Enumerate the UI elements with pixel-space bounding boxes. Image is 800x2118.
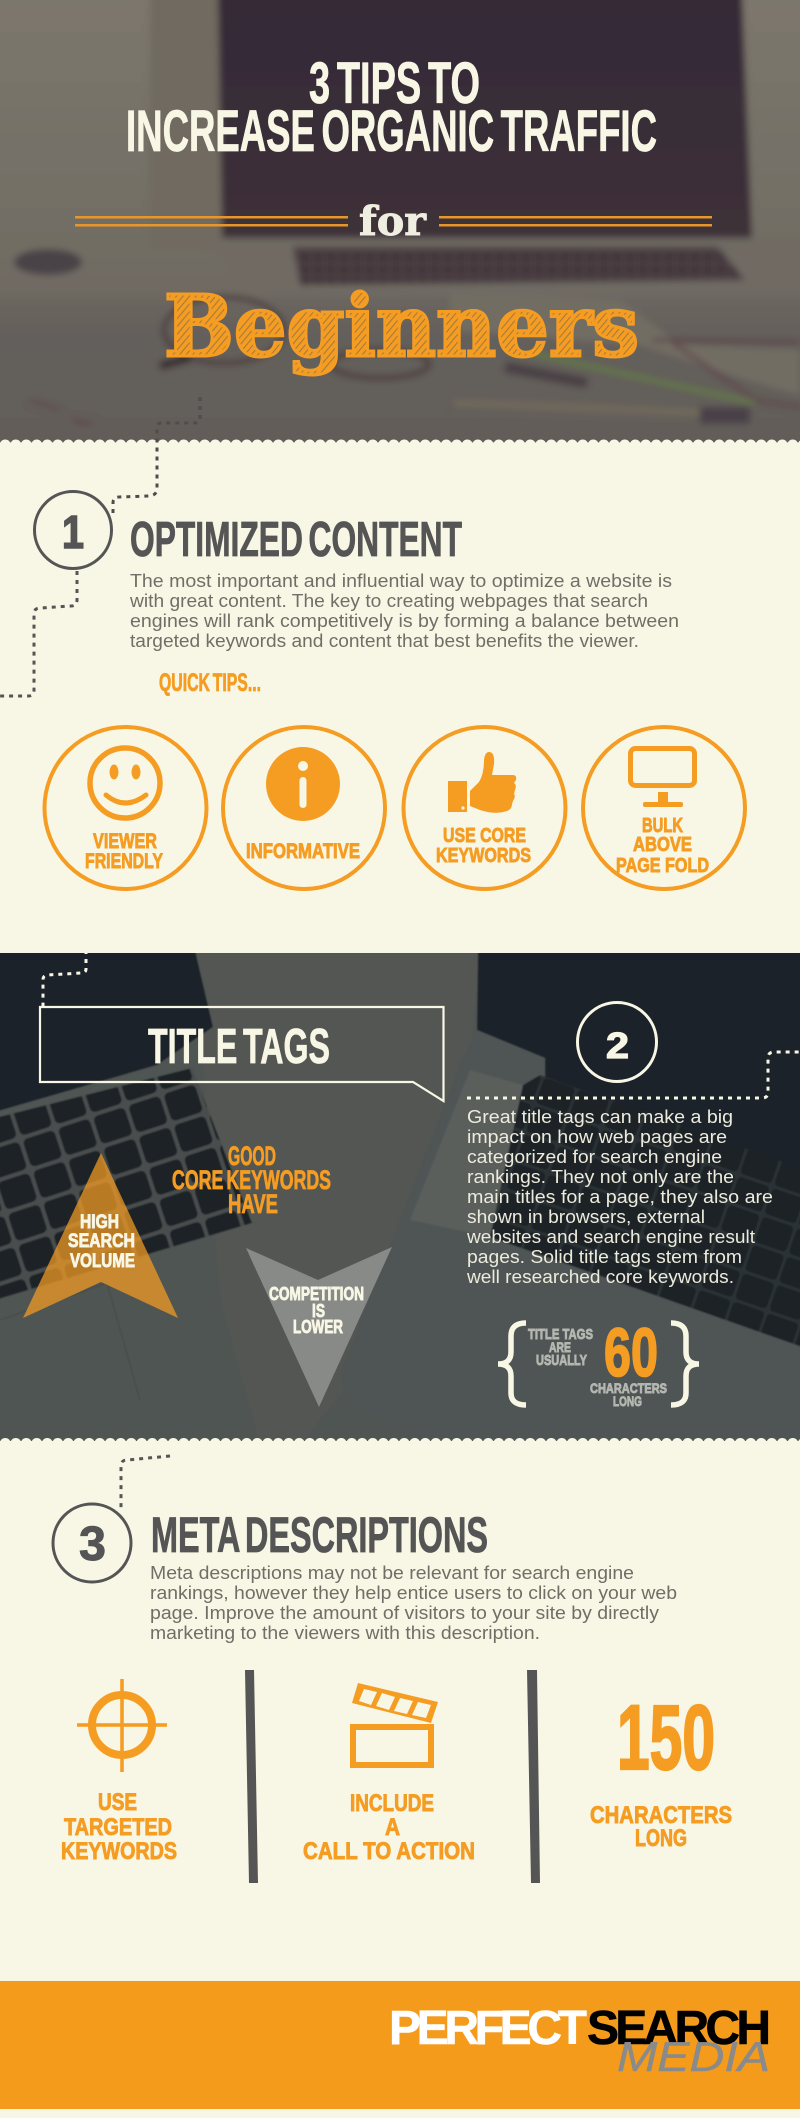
tip: use core keywords xyxy=(404,727,566,889)
panel: title tags xyxy=(0,950,800,1445)
icon: monitor xyxy=(630,748,694,807)
body text xyxy=(150,1563,677,1643)
divider xyxy=(527,1670,540,1883)
speech box with heading: TITLE TAGS xyxy=(148,1020,330,1074)
dotted connector: hero to step 1 xyxy=(113,397,200,518)
body text: targeted keywords and content that best benefits the viewer. xyxy=(130,631,639,651)
step number 3 xyxy=(53,1504,131,1582)
divider xyxy=(245,1670,258,1883)
body text: main titles for a page, they also are xyxy=(467,1187,773,1207)
arrow down: competition is lower: COMPETITION xyxy=(269,1284,364,1304)
callout: 60 characters: CHARACTERS xyxy=(590,1380,667,1396)
panel: optimized content xyxy=(0,492,745,889)
body text: shown in browsers, external xyxy=(467,1207,705,1227)
body text: categorized for search engine xyxy=(467,1147,722,1167)
arrow up: high search volume: HIGH xyxy=(80,1212,119,1233)
item: use targeted keywords xyxy=(61,1679,177,1865)
callout: 60 characters: TITLE TAGS xyxy=(528,1326,593,1343)
body text: impact on how web pages are xyxy=(467,1127,727,1147)
dark section background photo xyxy=(0,950,800,1445)
body text xyxy=(466,1107,773,1287)
item: use targeted keywords: TARGETED xyxy=(64,1814,172,1841)
arrow up: high search volume xyxy=(23,1153,178,1318)
good core keywords label: GOOD xyxy=(228,1141,276,1171)
panel: footer xyxy=(0,1981,800,2109)
callout: 60 characters xyxy=(498,1314,699,1409)
tip: viewer friendly: FRIENDLY xyxy=(85,850,163,873)
speech box with heading xyxy=(40,1007,444,1101)
item: use targeted keywords: KEYWORDS xyxy=(61,1838,177,1865)
scalloped edge: hero xyxy=(0,440,800,452)
tip: bulk above page fold: PAGE FOLD xyxy=(616,855,709,877)
panel: hero xyxy=(0,0,800,450)
heading: META DESCRIPTIONS xyxy=(151,1507,488,1563)
good core keywords label: HAVE xyxy=(228,1189,278,1219)
item: include a call to action: A xyxy=(385,1814,400,1841)
for divider: for xyxy=(359,198,427,245)
body text: Meta descriptions may not be relevant for search engine xyxy=(150,1563,634,1583)
quick tips label: QUICK TIPS... xyxy=(159,669,261,697)
icon: target xyxy=(77,1679,167,1772)
step number 2 xyxy=(578,1002,656,1082)
step number 2: 2 xyxy=(606,1025,629,1066)
arrow up: high search volume: VOLUME xyxy=(70,1251,135,1272)
callout: 60 characters: USUALLY xyxy=(536,1352,587,1369)
body text: websites and search engine result xyxy=(466,1227,755,1247)
body text: page. Improve the amount of visitors to your site by directly xyxy=(150,1603,659,1623)
body text xyxy=(129,571,679,651)
icon: info xyxy=(266,747,340,821)
callout: 60 characters: ARE xyxy=(549,1339,571,1355)
body text: well researched core keywords. xyxy=(466,1267,734,1287)
tip: viewer friendly xyxy=(44,727,206,889)
tip: bulk above page fold: BULK xyxy=(642,815,683,837)
step number 1: 1 xyxy=(62,506,84,558)
callout: 60 characters: 60 xyxy=(604,1314,658,1391)
tip: informative: INFORMATIVE xyxy=(246,840,360,863)
heading: OPTIMIZED CONTENT xyxy=(130,513,462,567)
body text: rankings, however they help entice users to click on your web xyxy=(150,1583,677,1603)
good core keywords label xyxy=(172,1141,331,1219)
item: 150 characters long xyxy=(590,1687,732,1852)
item: 150 characters long: CHARACTERS xyxy=(590,1802,732,1829)
beginners heading: Beginners xyxy=(164,277,639,377)
logo: PERFECT xyxy=(389,2002,587,2055)
body text: engines will rank competitively is by forming a balance between xyxy=(130,611,679,631)
body text: pages. Solid title tags stem from xyxy=(467,1247,742,1267)
arrow down: competition is lower: IS xyxy=(312,1301,325,1321)
step number 3: 3 xyxy=(79,1518,106,1571)
scalloped edge: title tags xyxy=(0,1438,800,1450)
item: include a call to action: CALL TO ACTION xyxy=(303,1838,475,1865)
arrow down: competition is lower xyxy=(246,1247,392,1407)
icon: clapperboard xyxy=(352,1683,438,1765)
hero background photo xyxy=(0,0,800,450)
title: 3 TIPS TO xyxy=(309,51,480,116)
tip: bulk above page fold xyxy=(583,727,745,889)
logo: MEDIA xyxy=(617,2033,770,2080)
dotted connector: top of section xyxy=(43,950,86,1007)
logo: SEARCH xyxy=(587,2002,771,2055)
body text: The most important and influential way to optimize a website is xyxy=(130,571,672,591)
dotted connector: step 2 xyxy=(467,1052,800,1098)
step number 1 xyxy=(34,492,112,568)
callout: 60 characters: LONG xyxy=(613,1393,642,1409)
item: 150 characters long: 150 xyxy=(617,1687,715,1789)
item: include a call to action: INCLUDE xyxy=(350,1790,434,1817)
arrow down: competition is lower: LOWER xyxy=(293,1317,343,1337)
item: 150 characters long: LONG xyxy=(635,1825,687,1852)
icon: thumbs up xyxy=(448,752,516,813)
title xyxy=(126,51,657,164)
arrow up: high search volume: SEARCH xyxy=(68,1231,135,1252)
panel: meta descriptions xyxy=(53,1456,732,1883)
icon: smiley xyxy=(90,748,160,818)
body text: marketing to the viewers with this description. xyxy=(150,1623,540,1643)
body text: with great content. The key to creating webpages that search xyxy=(129,591,648,611)
tip: use core keywords: USE CORE xyxy=(443,825,526,847)
dotted connector: step 1 down xyxy=(0,571,77,696)
tip: viewer friendly: VIEWER xyxy=(93,830,157,853)
tip: use core keywords: KEYWORDS xyxy=(436,845,531,867)
body text: Great title tags can make a big xyxy=(467,1107,733,1127)
item: use targeted keywords: USE xyxy=(98,1789,137,1816)
logo xyxy=(389,2002,771,2080)
dotted connector: step 3 xyxy=(121,1456,170,1510)
good core keywords label: CORE KEYWORDS xyxy=(172,1165,331,1195)
tip: bulk above page fold: ABOVE xyxy=(633,834,692,856)
tip: informative xyxy=(223,727,385,889)
body text: rankings. They not only are the xyxy=(467,1167,734,1187)
item: include a call to action xyxy=(303,1683,475,1865)
